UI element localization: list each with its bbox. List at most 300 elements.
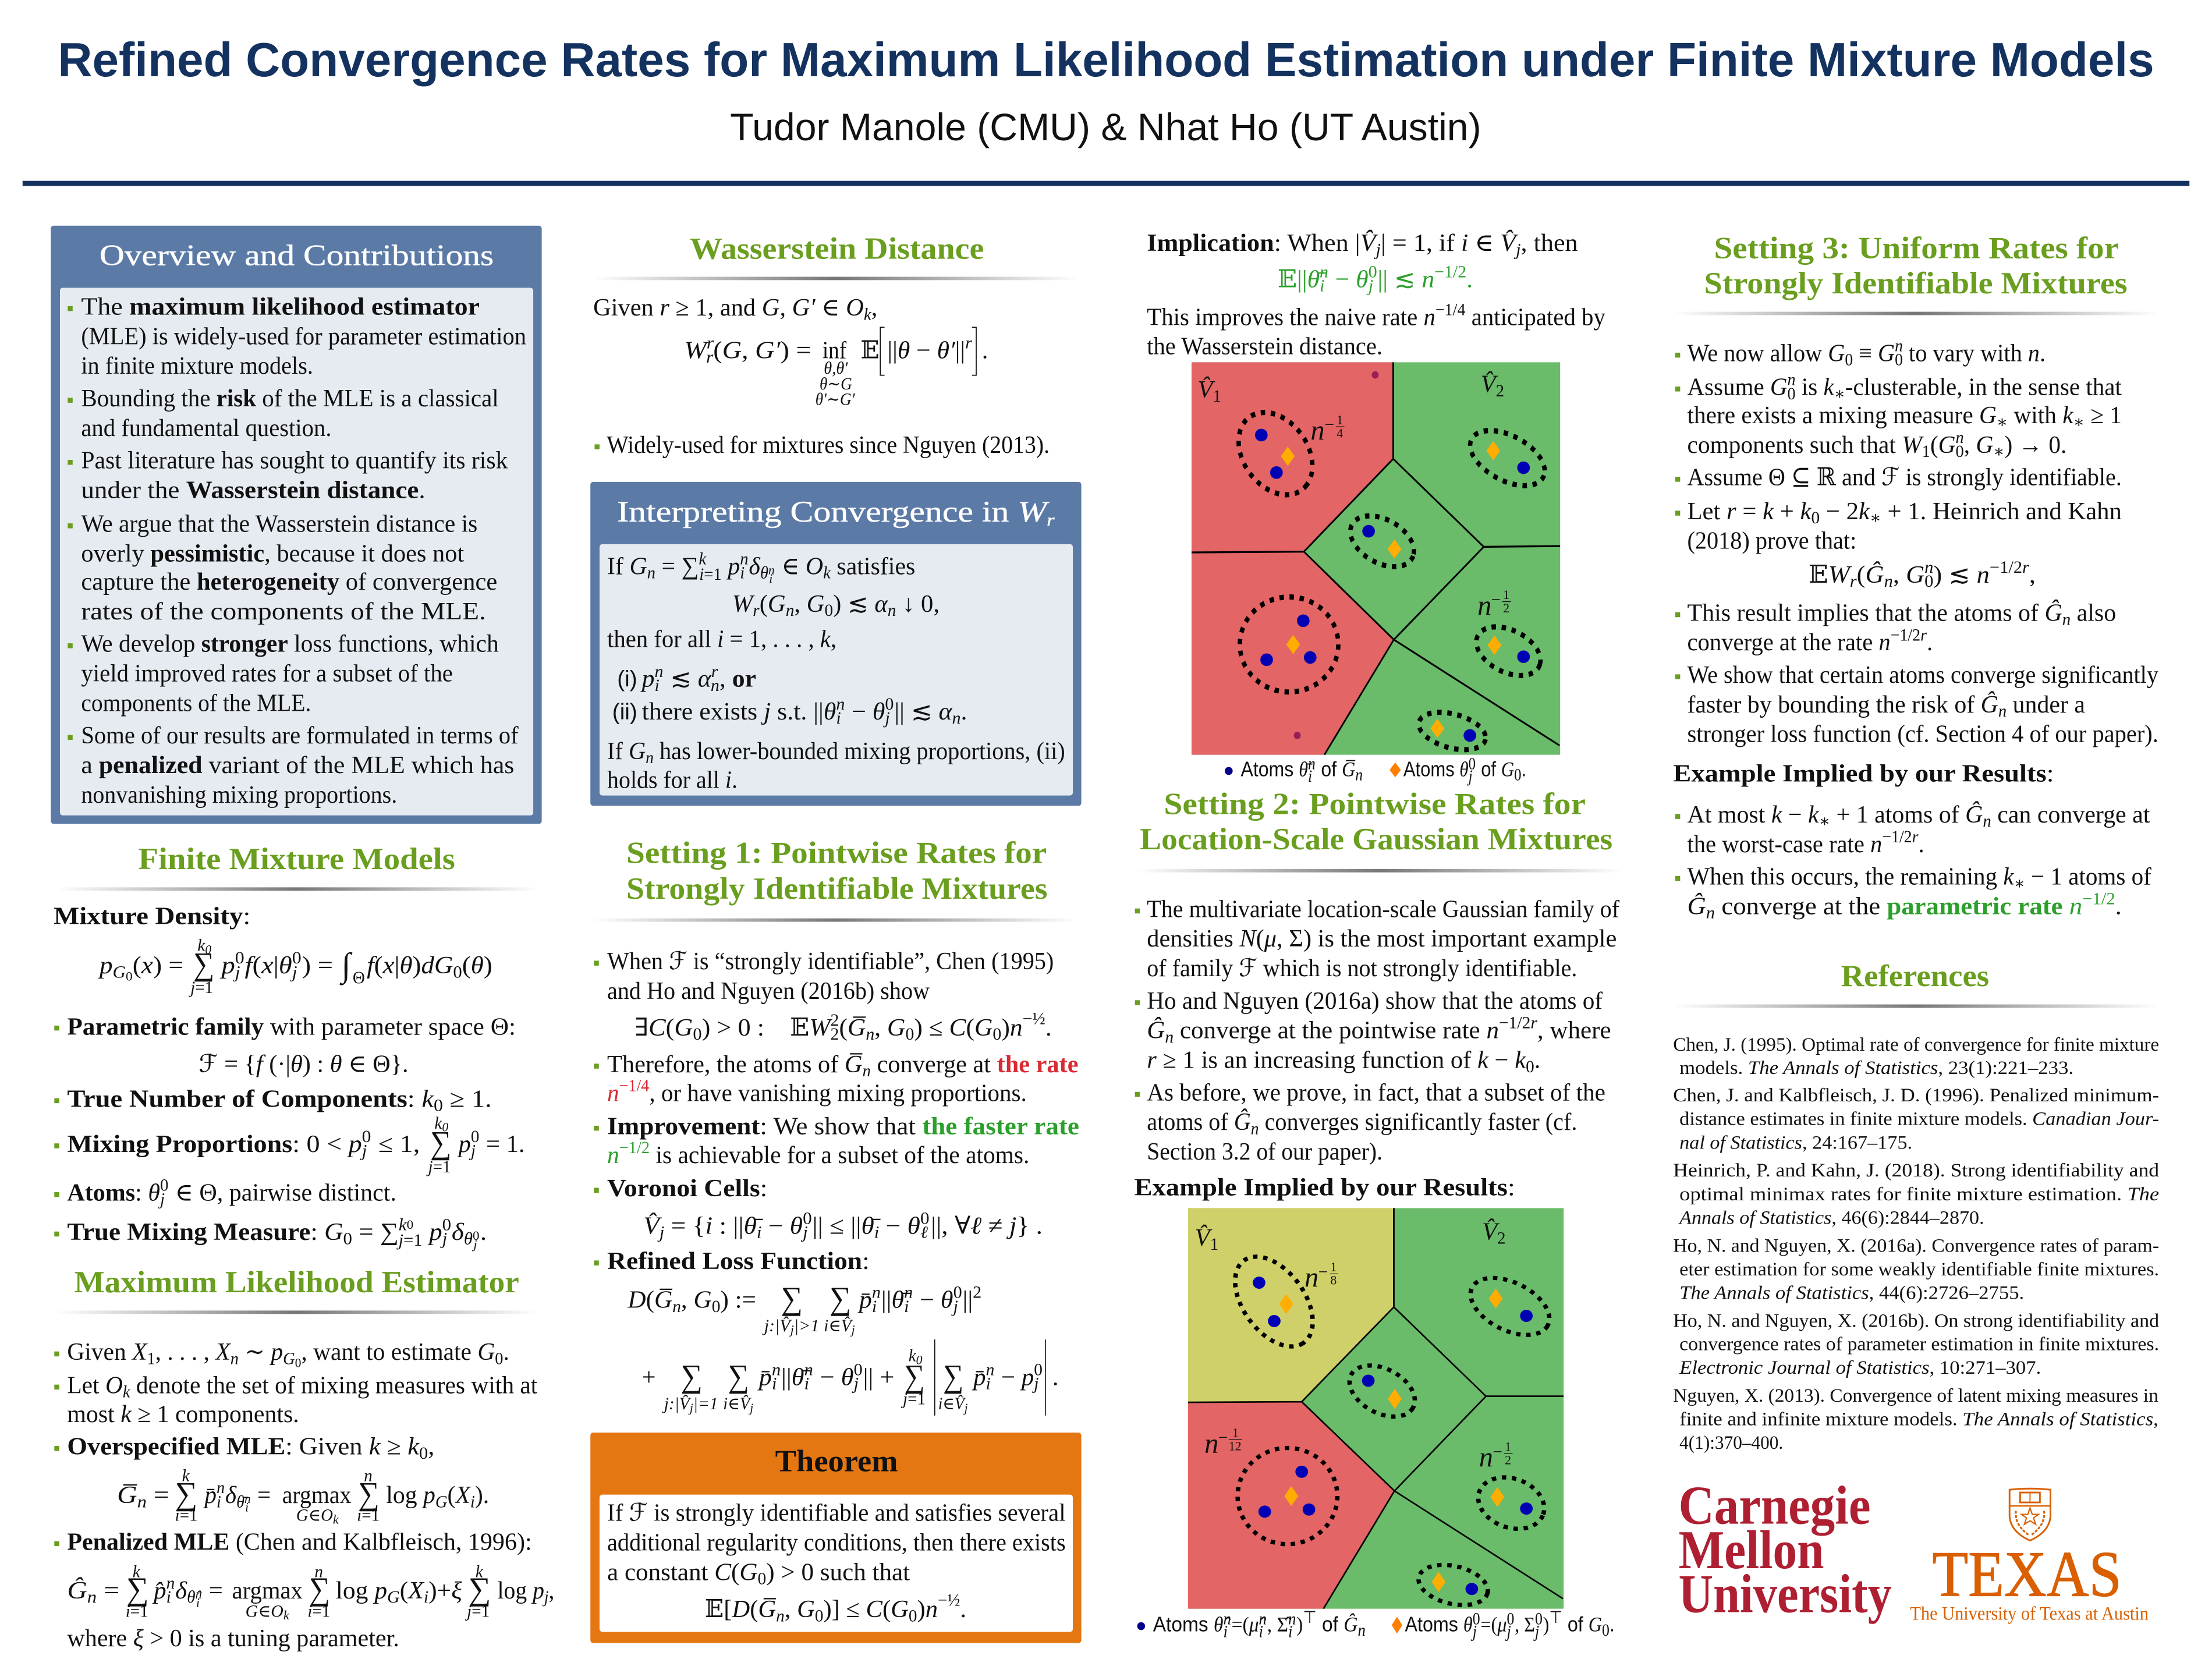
statement body: − [845, 698, 873, 725]
section: finite mixture models [54, 841, 538, 1252]
bullet: refined loss function: j [951, 1298, 958, 1316]
statement body: n [647, 564, 655, 583]
bullet: set of mixing measures [54, 1371, 538, 1428]
subheading: example implied: Example Implied by our Results : [1134, 1174, 1515, 1201]
bullet: heinrich and kahn: − 2 [1820, 498, 1859, 525]
wordmark: university of texas at austin: The University of Texas at Austin [1910, 1604, 2149, 1625]
legend: voronoi diagram 2: =( [1232, 1613, 1249, 1636]
bullet: refined loss function: j [748, 1401, 753, 1415]
title: Refined Convergence Rates for Maximum Likelihood Estimation under Finite Mixture Models [58, 33, 2154, 87]
authors: Tudor Manole (CMU) & Nhat Ho (UT Austin) [730, 106, 1481, 148]
mixture density: (x|θ [253, 952, 291, 979]
bullet: overspecified MLE: G [435, 1493, 448, 1511]
mixture density: 0 [126, 969, 133, 983]
mixture density: ) = [302, 952, 333, 979]
legend: voronoi diagram 2: 0 [1535, 1610, 1543, 1629]
bullet: clusterable [1675, 371, 2122, 461]
bullet: overspecified MLE: i [470, 1493, 475, 1511]
bullet: certain atoms: stronger loss function (cf. Section 4 of our paper). [1687, 721, 2158, 748]
legend: voronoi diagram 1: Atoms θ̄ [1240, 757, 1309, 781]
implication text: 0 [1369, 263, 1377, 281]
bullet: heinrich and kahn: −1/2 [1990, 558, 2022, 577]
chart: voronoi diagram location-scale example 2: 2 [1505, 1454, 1511, 1467]
bullet: refined loss function: ∑ [781, 1281, 803, 1317]
bullet: pessimistic: We argue that the Wasserstein distance is [81, 511, 477, 538]
bullet: refined loss function: θ̄ [891, 1286, 911, 1314]
mixture density: 0 [453, 963, 462, 981]
bullet: when this occurs: n [1706, 904, 1715, 923]
bullet: heinrich and kahn: G [1906, 561, 1924, 589]
statement body: δ [749, 552, 761, 580]
theorem statement: 0 [815, 1607, 823, 1625]
bullet: penalized: nonvanishing mixing proportions. [81, 781, 397, 809]
bullet: true mixing measure: 0 [473, 1229, 480, 1243]
bullet: result implies: also [2071, 599, 2116, 626]
mixture density: ∑ [193, 947, 214, 983]
implication text: n [1320, 263, 1328, 281]
chart: voronoi diagram location-scale example 2: 12 [1229, 1439, 1242, 1453]
bullet: refined loss function: |=1 [693, 1395, 718, 1413]
bullet: clusterable: ∗ [1993, 442, 2005, 461]
bullet: refined loss function: n [672, 1298, 681, 1316]
bullet: mixing proportions: j=1 [426, 1158, 451, 1176]
bullet: at most: . [1918, 831, 1924, 858]
statement body: θ [873, 698, 885, 725]
statement body: G [768, 590, 786, 618]
statement body: ↓ 0, [896, 590, 940, 618]
mixture density: x) = [141, 952, 182, 979]
reference: Nguyen 2013: 4(1):370–400. [1679, 1433, 1783, 1454]
bullet: voronoi cells: ℓ [920, 1224, 928, 1242]
bullet: strongly identifiable: and Ho and Nguyen (2016b) show [607, 977, 930, 1005]
legend: voronoi diagram 1: n [1355, 766, 1363, 785]
bullet: voronoi cells: 0 [803, 1209, 812, 1228]
bullet: clusterable: with [2008, 402, 2062, 429]
legend: voronoi diagram 2: ) [1296, 1613, 1303, 1636]
chart: voronoi diagram location-scale example 2: 1 [1330, 1260, 1337, 1274]
bullet: when this occurs: When this occurs, the remaining k [1687, 863, 2014, 891]
bullet: strongly identifiable: 0 [693, 1025, 702, 1044]
bullet: strongly identifiable: C(G [949, 1014, 992, 1041]
bullet: risk [68, 385, 499, 442]
statement body: α [874, 590, 888, 618]
bullet: penalized MLE: j [542, 1588, 549, 1607]
bullet: refined loss function: || [881, 1286, 891, 1314]
bullet: strongly identifiable: ) > 0 : [702, 1014, 764, 1041]
statement body: O [806, 552, 823, 580]
bullet: heinrich and kahn: (2018) prove that: [1687, 527, 1856, 555]
bullet: refined loss function: Refined Loss Function : [607, 1247, 870, 1275]
heading: interpreting convergence: r [1047, 511, 1055, 530]
bullet: heinrich and kahn: + 1. Heinrich and Kahn [1881, 498, 2122, 525]
bullet: at most: r [1912, 828, 1919, 846]
bullet: strongly identifiable: ) ≤ [914, 1014, 949, 1041]
section: setting 2 [1134, 786, 1622, 1201]
bullet: result implies: −1/2 [1891, 626, 1920, 644]
bullet: overspecified MLE: log p [386, 1481, 435, 1509]
heading: overview: Overview and Contributions [100, 240, 494, 272]
legend: voronoi diagram 2: , Σ̂ [1267, 1613, 1292, 1636]
definition of Wasserstein distance: W [684, 337, 709, 364]
bullet: mixing proportions: Mixing Proportions : 0 < p [67, 1130, 361, 1158]
bullet: heinrich and kahn: , [2029, 561, 2036, 589]
bullet: penalized: Some of our results are formulated in terms of [81, 722, 519, 749]
theorem statement: n [776, 1607, 785, 1625]
theorem statement: ) > 0 such that [766, 1558, 910, 1586]
bullet: mixing proportions: j [359, 1142, 367, 1160]
implication text: j [1373, 240, 1381, 259]
legend: voronoi diagram 1: of [1476, 757, 1501, 781]
statement body: , [719, 665, 732, 693]
statement body: holds for all i. [607, 767, 738, 794]
bullet: improvement [594, 1112, 1079, 1169]
bullet: refined loss function: − [913, 1286, 941, 1314]
heading: setting 2: Location-Scale Gaussian Mixtures [1140, 821, 1612, 856]
bullet: therefore: , or have vanishing mixing proportions. [649, 1080, 1027, 1107]
bullet: penalized MLE: j=1 [465, 1602, 490, 1621]
implication text: 𝔼||θ̄ [1278, 265, 1319, 293]
bullet: strongly identifiable: 2 [831, 1011, 839, 1030]
bullet: MLE: The maximum likelihood estimator [81, 293, 480, 320]
mixture density: Θ [353, 969, 365, 987]
bullet: voronoi cells: = { [664, 1212, 706, 1239]
bullet: refined loss function: j [789, 1323, 794, 1337]
theorem statement: )] ≤ [823, 1596, 866, 1623]
legend: voronoi diagram 2: ) [1543, 1613, 1549, 1636]
bullet: as before: As before, we prove, in fact, that a subset of the [1147, 1079, 1605, 1106]
bullet: as before: Section 3.2 of our paper). [1147, 1138, 1383, 1165]
bullet: when this occurs: Ĝ [1687, 892, 1706, 920]
chart: voronoi diagram location-scale example 2: 1 [1505, 1440, 1511, 1454]
mixture density: ∫ [339, 946, 352, 986]
bullet: pointwise rate: Ĝ [1147, 1017, 1165, 1044]
bullet: allow to vary: 0 [1845, 351, 1853, 370]
bullet: location-scale family: The multivariate location-scale Gaussian family of [1147, 895, 1620, 923]
bullet: risk: Bounding the risk of the MLE is a classical [81, 385, 499, 412]
legend: voronoi diagram 1: . [1522, 757, 1526, 781]
bullet: heinrich and kahn: r [2022, 558, 2030, 577]
bullet: when this occurs: −1/2 [2082, 889, 2115, 908]
bullet: refined loss function: i [772, 1375, 777, 1394]
mixture density: ( [462, 952, 471, 979]
bullet: therefore: n [607, 1080, 619, 1107]
wordmark: TEXAS: TEXAS [1933, 1539, 2122, 1611]
logo: Carnegie Mellon University: Mellon [1678, 1520, 1824, 1580]
bullet: strongly identifiable: When ℱ is “strongly identifiable”, Chen (1995) [607, 948, 1054, 975]
section: setting 1 [593, 835, 1079, 1416]
statement body: θ [760, 564, 768, 583]
bullet: overspecified MLE: n [244, 1492, 251, 1506]
chart: voronoi diagram pointwise example 1: 1 [1337, 413, 1343, 427]
bullet: true mixing measure [54, 1215, 487, 1252]
theorem statement: additional regularity conditions, then there exists [607, 1529, 1066, 1556]
implication text: || ≲ [1378, 265, 1422, 293]
chart: voronoi diagram pointwise example 1: 2 [1496, 382, 1504, 400]
bullet: when this occurs: parametric rate n [1887, 892, 2082, 920]
bullet: refined loss function: 0 [854, 1360, 863, 1379]
bullet: improvement: Improvement : We show that the faster rate [607, 1112, 1079, 1140]
bullet: at most: ∗ [1819, 812, 1830, 831]
bullet: refined loss function: θ [941, 1286, 953, 1314]
panel: interpreting convergence [590, 482, 1082, 806]
theorem statement: G [797, 1596, 815, 1623]
bullet: refined loss function: n [904, 1284, 913, 1302]
bullet: given samples: Given X [67, 1338, 147, 1366]
bullet: stronger loss: components of the MLE. [81, 689, 311, 717]
statement body: If G [607, 552, 647, 580]
implication text: −1/2 [1434, 263, 1466, 281]
bullet: as before: n [1251, 1119, 1259, 1138]
section: references [1673, 958, 2160, 1454]
bullet: refined loss function: p̄ [857, 1286, 872, 1314]
statement body: j [882, 709, 890, 728]
bullet: allow to vary: n [1895, 336, 1903, 355]
bullet: at most: Ĝ [1965, 801, 1983, 828]
bullet: voronoi cells: j [800, 1224, 808, 1242]
bullet: overspecified MLE: , [428, 1433, 434, 1461]
bullet: overspecified MLE: p̄ [203, 1481, 217, 1509]
bullet: allow to vary: G [1878, 339, 1895, 367]
bullet: result implies: r [1920, 626, 1927, 644]
definition of Wasserstein distance: . [982, 337, 988, 364]
theorem statement: 𝔼[D(G̅ [705, 1596, 776, 1623]
bullet: voronoi cells: Voronoi Cells : [607, 1175, 767, 1202]
legend: voronoi diagram 2: μ̂ [1249, 1613, 1266, 1636]
bullet: when this occurs [1675, 863, 2152, 923]
statement body: n [711, 676, 719, 695]
bullet: pointwise rate: . [1534, 1047, 1540, 1074]
legend: voronoi diagram 2: j [1533, 1622, 1539, 1641]
bullet: clusterable: ( [1930, 431, 1938, 459]
bullet: heinrich and kahn: ( [1857, 561, 1865, 589]
bullet: true mixing measure: j [396, 1231, 403, 1250]
heading: finite mixture models: Finite Mixture Models [139, 841, 455, 876]
bullet: heinrich and kahn: k [1859, 498, 1870, 525]
bullet: atoms: Atoms: θ [67, 1179, 160, 1206]
bullet: when this occurs: . [2115, 892, 2122, 920]
legend: voronoi diagram 1: n [1308, 754, 1316, 773]
bullet: MLE [68, 293, 526, 380]
bullet: refined loss function: 2 [973, 1284, 981, 1302]
bullet: clusterable: G [1976, 431, 1993, 459]
implication text: . [1466, 265, 1473, 293]
bullet: given samples: 0 [495, 1349, 503, 1368]
definition of Wasserstein distance: 𝔼 [860, 337, 880, 364]
bullet: given samples: p [269, 1338, 283, 1366]
bullet: penalized MLE: )+ [428, 1577, 451, 1604]
bullet: pointwise rate: , where [1537, 1017, 1611, 1044]
bullet: clusterable: n [1956, 428, 1964, 447]
bullet: clusterable: 0 [1788, 385, 1796, 403]
bullet: overspecified MLE: n [364, 1467, 373, 1486]
definition of Wasserstein distance: , [871, 294, 877, 321]
definition of Wasserstein distance: k [864, 305, 872, 324]
bullet: true mixing measure: j [472, 1238, 477, 1252]
bullet: voronoi cells: ||, ∀ [931, 1212, 971, 1239]
implication text: i [1320, 277, 1324, 296]
bullet: result implies: n [2062, 611, 2071, 629]
bullet: true mixing measure: p [423, 1218, 442, 1246]
bullet: pointwise rate: n [1165, 1028, 1174, 1047]
bullet: voronoi cells: θ̄ [861, 1212, 881, 1239]
bullet: overspecified MLE: = [251, 1481, 271, 1509]
bullet: mixing proportions [54, 1114, 525, 1176]
reference: Ho and Nguyen 2016a: Ho, N. and Nguyen, X. (2016a). Convergence rates of param- [1673, 1235, 2159, 1256]
bullet: clusterable: components such that W [1687, 431, 1923, 459]
bullet: strongly identifiable: n [866, 1025, 874, 1044]
definition of Wasserstein distance: G, G′ ) = [722, 337, 809, 364]
bullet: strongly identifiable: 0 [905, 1025, 914, 1044]
mixture density: Mixture Density : [54, 902, 250, 930]
bullet: penalized MLE: = [97, 1577, 119, 1604]
bullet: heinrich and kahn: ∗ [1870, 509, 1881, 527]
statement body: r [711, 662, 718, 681]
bullet: pointwise rate: r [1530, 1014, 1538, 1033]
bullet: parametric family [54, 1013, 516, 1077]
bullet: penalized MLE: ξ [451, 1577, 463, 1604]
bullet: clusterable: -clusterable, in the sense that [1845, 374, 2122, 401]
heading: references: References [1841, 958, 1989, 993]
bullet: strongly identifiable: ∃C(G [634, 1014, 692, 1041]
bullet: as before: converges significantly faster (cf. [1259, 1108, 1577, 1136]
bullet: clusterable: n [1788, 371, 1796, 389]
statement body: r [753, 601, 760, 620]
bullet: refined loss function: j [688, 1401, 693, 1415]
legend: voronoi diagram 1: Atoms θ [1403, 757, 1470, 781]
bullet: at most: the worst-case rate n [1687, 831, 1883, 858]
mixture density: 0 [292, 949, 302, 967]
legend: voronoi diagram 2: , Σ [1515, 1613, 1535, 1636]
bullet: true mixing measure: 0 [442, 1215, 451, 1234]
bullet: at most: n [1983, 812, 1991, 831]
bullet: strongly identifiable: G [887, 1014, 905, 1041]
heading: setting 3 [1704, 230, 2128, 300]
definition of Wasserstein distance: Given r ≥ 1, and G, G′ ∈ O [593, 294, 864, 321]
statement body: α [698, 665, 711, 693]
bullet: mixing proportions: p [457, 1130, 471, 1158]
definition of Wasserstein distance [593, 294, 988, 409]
bullet: refined loss function: . [1052, 1363, 1059, 1391]
bullet: allow to vary: n. [2028, 339, 2046, 367]
bullet: refined loss function: i [872, 1298, 877, 1316]
bullet: atoms: 0 [160, 1176, 168, 1194]
statement body: W [732, 590, 755, 618]
chart: voronoi diagram location-scale example 2: 1 [1210, 1235, 1218, 1254]
bullet: strongly identifiable assumption: Assume Θ ⊆ ℝ and ℱ is strongly identifiable. [1687, 464, 2122, 491]
definition of Wasserstein distance: θ,θ′ [824, 359, 848, 378]
mixture density: k [197, 936, 205, 955]
chart: voronoi diagram pointwise example 1: n [1477, 590, 1491, 621]
bullet: clusterable: 1 [1922, 442, 1930, 461]
bullet: clusterable: ∗ [1997, 413, 2008, 431]
heading: setting 2 [1140, 786, 1612, 856]
section: setting 3 [1673, 230, 2159, 923]
panel: overview and contributions [51, 226, 542, 824]
heading: maximum likelihood estimator: Maximum Likelihood Estimator [74, 1264, 519, 1299]
statement body: k [823, 564, 831, 583]
bullet: voronoi cells: i [874, 1224, 879, 1242]
bullet: penalized: a penalized variant of the MLE which has [81, 751, 514, 779]
bullet: atoms: ∈ Θ, pairwise distinct. [169, 1179, 396, 1206]
bullet: therefore: Therefore, the atoms of G̅ [607, 1051, 863, 1078]
section: maximum likelihood estimator [54, 1264, 554, 1652]
bullet: given samples: 0 [295, 1356, 301, 1370]
implication text: the Wasserstein distance. [1147, 332, 1383, 360]
bullet: certain atoms: under a [2007, 691, 2085, 718]
bullet: MLE: in finite mixture models. [81, 352, 313, 380]
bullet: allow to vary: ≡ [1853, 339, 1878, 367]
bullet: voronoi cells: V̂ [643, 1212, 662, 1239]
chart: voronoi diagram location-scale example 2: n [1304, 1262, 1318, 1293]
bullet: penalized MLE: , [549, 1577, 554, 1604]
bullet: penalized MLE: i=1 [126, 1602, 148, 1621]
bullet: mixing proportions: ≤ 1, [371, 1130, 420, 1158]
bullet: pointwise rate: −1/2 [1499, 1014, 1530, 1033]
bullet: mixing proportions: = 1. [480, 1130, 525, 1158]
bullet: when this occurs: converge at the [1715, 892, 1887, 920]
bullet: refined loss function: 0 [1034, 1360, 1043, 1379]
definition of Wasserstein distance: r [707, 334, 714, 353]
bullet: clusterable: ∗ [2073, 413, 2085, 431]
bullet: penalized MLE: G [387, 1588, 400, 1607]
chart: voronoi diagram location-scale example 2: n [1479, 1442, 1493, 1473]
bullet: overspecified MLE: δ [225, 1481, 237, 1509]
bullet: penalized [68, 722, 519, 809]
statement body: i [769, 572, 772, 586]
bullet: penalized MLE: i=1 [307, 1602, 330, 1621]
reference: Chen 1995: Chen, J. (1995). Optimal rate of convergence for finite mixture [1673, 1034, 2159, 1055]
implication text: Implication : When | V̂ [1147, 229, 1375, 257]
bullet: clusterable: is [1796, 374, 1824, 401]
chart: voronoi diagram pointwise example 1: − [1325, 416, 1334, 434]
bullet: past literature [68, 447, 508, 504]
statement body: i [699, 565, 704, 584]
bullet: overspecified MLE: i=1 [357, 1506, 380, 1525]
bullet: true number of components: 0 [434, 1097, 443, 1115]
bullet: refined loss function: − [814, 1363, 841, 1391]
bullet: clusterable: ∗ [1834, 385, 1845, 403]
legend: voronoi diagram 2: j [1470, 1622, 1477, 1641]
logo: University of Texas at Austin [1910, 1488, 2149, 1625]
reference: Nguyen 2013: finite and infinite mixture models. The Annals of Statistics , [1679, 1409, 2158, 1430]
statement body: ( [760, 590, 768, 618]
legend: voronoi diagram 2: Ĝ [1343, 1613, 1358, 1636]
legend: voronoi diagram 2: n [1223, 1610, 1231, 1629]
bullet: overspecified MLE: n [217, 1479, 225, 1497]
bullet: penalized MLE [54, 1529, 554, 1652]
statement body: there exists j s.t. ||θ [642, 698, 836, 725]
chart: voronoi diagram location-scale example 2: − [1318, 1263, 1328, 1281]
bullet: improvement: is achievable for a subset of the atoms. [650, 1142, 1029, 1169]
bullet: refined loss function: θ [841, 1363, 854, 1391]
bullet: overspecified MLE: G̅ [117, 1481, 137, 1509]
chart: voronoi diagram location-scale example 2: V̂ [1195, 1224, 1213, 1252]
legend: voronoi diagram 2: n [1259, 1610, 1267, 1629]
statement body: G [807, 590, 824, 618]
reference: Ho and Nguyen 2016b: convergence rates of parameter estimation in finite mixtures. [1679, 1334, 2159, 1355]
bullet: pessimistic: capture the heterogeneity of convergence [81, 568, 497, 595]
implication text: j [1513, 240, 1521, 259]
bullet: penalized MLE: k [283, 1608, 289, 1622]
bullet: refined loss function: ∑ [680, 1358, 703, 1394]
bullet: therefore [594, 1051, 1078, 1107]
bullet: penalized MLE: n [166, 1574, 175, 1593]
bullet: therefore: the rate [997, 1051, 1078, 1078]
statement body: n [836, 695, 845, 714]
legend: voronoi diagram 2: ⊤ [1303, 1608, 1317, 1627]
legend: voronoi diagram 1: of [1316, 757, 1342, 781]
bullet: result implies: This result implies that the atoms of Ĝ [1687, 599, 2062, 626]
